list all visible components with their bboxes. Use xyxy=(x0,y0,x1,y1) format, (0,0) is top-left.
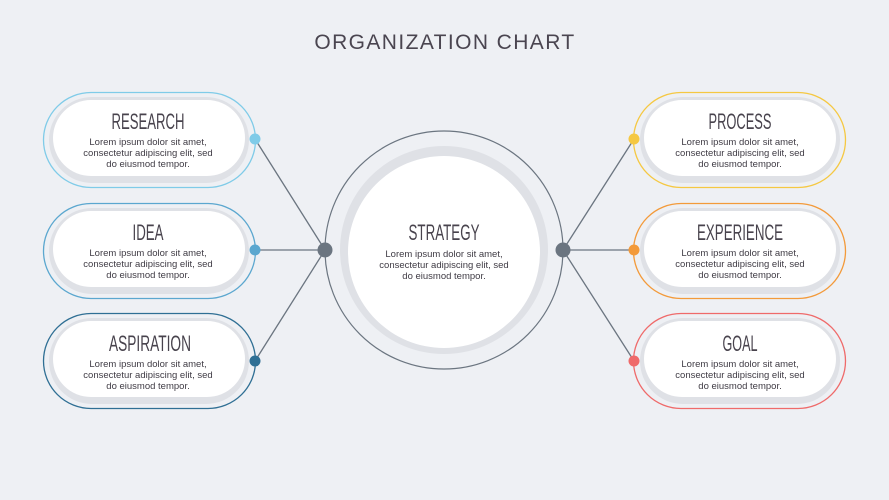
panel: idea: Lorem ipsum dolor sit amet, xyxy=(89,248,207,259)
center: strategy: STRATEGY xyxy=(408,220,480,245)
panel: research: do eiusmod tempor. xyxy=(106,159,190,170)
panel: experience: consectetur adipiscing elit, sed xyxy=(675,259,805,270)
panel: idea: IDEA xyxy=(132,220,164,245)
panel: experience: Lorem ipsum dolor sit amet, xyxy=(681,248,799,259)
title: ORGANIZATION CHART xyxy=(314,31,576,54)
panel: goal: do eiusmod tempor. xyxy=(698,381,782,392)
panel: process: do eiusmod tempor. xyxy=(698,159,782,170)
center: strategy: do eiusmod tempor. xyxy=(402,271,486,282)
center: strategy: Lorem ipsum dolor sit amet, xyxy=(385,249,503,260)
panel: process: PROCESS xyxy=(708,109,772,134)
hub dots xyxy=(318,242,570,258)
panel: experience xyxy=(628,204,846,298)
panel: aspiration: do eiusmod tempor. xyxy=(106,381,190,392)
connector lines xyxy=(255,139,634,361)
panel: aspiration: consectetur adipiscing elit, sed xyxy=(83,370,213,381)
panel: aspiration: Lorem ipsum dolor sit amet, xyxy=(89,359,207,370)
panel: process xyxy=(628,92,846,188)
panel: research xyxy=(44,92,260,188)
panel: research: RESEARCH xyxy=(112,109,184,134)
panel: idea: consectetur adipiscing elit, sed xyxy=(83,259,213,270)
panel: aspiration: ASPIRATION xyxy=(109,331,191,356)
panel: idea: do eiusmod tempor. xyxy=(106,270,190,281)
panel: experience: do eiusmod tempor. xyxy=(698,270,782,281)
panel: research: consectetur adipiscing elit, sed xyxy=(83,148,213,159)
panel: process: Lorem ipsum dolor sit amet, xyxy=(681,137,799,148)
panel: experience: EXPERIENCE xyxy=(697,220,783,245)
panel: goal: Lorem ipsum dolor sit amet, xyxy=(681,359,799,370)
panel: idea xyxy=(44,204,260,298)
panel: goal: GOAL xyxy=(722,331,758,356)
panel: process: consectetur adipiscing elit, sed xyxy=(675,148,805,159)
panel: goal xyxy=(628,314,846,408)
panel: research: Lorem ipsum dolor sit amet, xyxy=(89,137,207,148)
panel: goal: consectetur adipiscing elit, sed xyxy=(675,370,805,381)
panel: aspiration xyxy=(44,314,260,408)
center: strategy xyxy=(325,131,563,369)
center: strategy: consectetur adipiscing elit, sed xyxy=(379,260,509,271)
